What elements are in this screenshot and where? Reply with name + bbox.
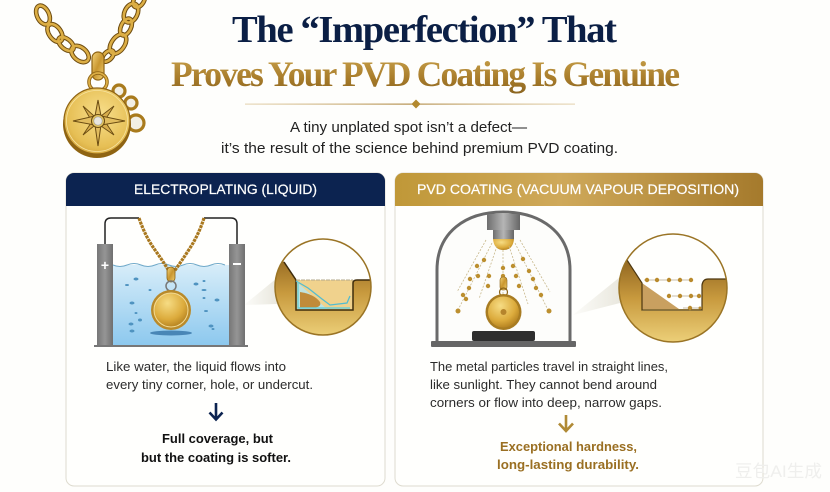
panel header: ELECTROPLATING (LIQUID) [134, 181, 317, 197]
description text: corners or flow into deep, narrow gaps. [430, 395, 662, 410]
panel frame [66, 173, 385, 486]
platform [431, 331, 576, 347]
result text: long-lasting durability. [497, 457, 639, 472]
description text: every tiny corner, hole, or undercut. [106, 377, 313, 392]
panel header [66, 173, 385, 206]
arrow [210, 403, 222, 420]
magnified view: liquid fills corners [275, 239, 372, 336]
particles row [644, 280, 702, 308]
vacuum chamber diagram [431, 212, 576, 347]
gold particles [456, 257, 552, 314]
chain [139, 218, 204, 273]
callout wedge [573, 277, 620, 315]
result text [497, 439, 639, 472]
pendant [150, 267, 192, 336]
electroplating tank diagram [94, 218, 248, 347]
base line [94, 345, 248, 347]
icon: gold chain [33, 0, 147, 65]
description text: The metal particles travel in straight lines, [430, 359, 668, 374]
description text: like sunlight. They cannot bend around [430, 377, 657, 392]
subtitle: A tiny unplated spot isn’t a defect— [290, 119, 527, 136]
watermark: 豆包AI生成 [735, 462, 822, 481]
callout wedge [244, 278, 277, 305]
description text [430, 359, 668, 410]
left electrode: + [101, 257, 109, 273]
necklace illustration [33, 0, 147, 158]
title line 2: Proves Your PVD Coating Is Genuine [171, 54, 680, 94]
title [171, 9, 680, 94]
icon: pendant bail [89, 52, 107, 91]
panel header [395, 173, 763, 206]
panel: electroplating [66, 173, 385, 486]
title line 1: The “Imperfection” That [232, 9, 617, 51]
panel header: PVD COATING (VACUUM VAPOUR DEPOSITION) [417, 181, 739, 197]
arrow [559, 415, 573, 431]
magnified view: particles blocked [615, 234, 728, 342]
pendant [486, 277, 522, 330]
water bath [113, 263, 229, 346]
description text [106, 359, 313, 392]
result text: Exceptional hardness, [500, 439, 637, 454]
dome [437, 212, 570, 341]
nozzle [487, 214, 520, 250]
panel frame [395, 173, 763, 486]
description text: Like water, the liquid flows into [106, 359, 286, 374]
bubbles [125, 278, 220, 332]
divider with diamond [245, 100, 575, 108]
result text: Full coverage, but [162, 431, 274, 446]
right electrode [229, 244, 245, 346]
left electrode [97, 244, 113, 346]
panel: PVD coating [395, 173, 763, 486]
subtitle: it’s the result of the science behind premium PVD coating. [221, 140, 618, 157]
particle streams [457, 240, 550, 312]
result text: but the coating is softer. [141, 450, 291, 465]
result text [141, 431, 291, 465]
subtitle [221, 119, 618, 157]
icon: compass medallion [63, 88, 131, 158]
wires [105, 218, 237, 244]
icon: small side links [113, 85, 144, 131]
